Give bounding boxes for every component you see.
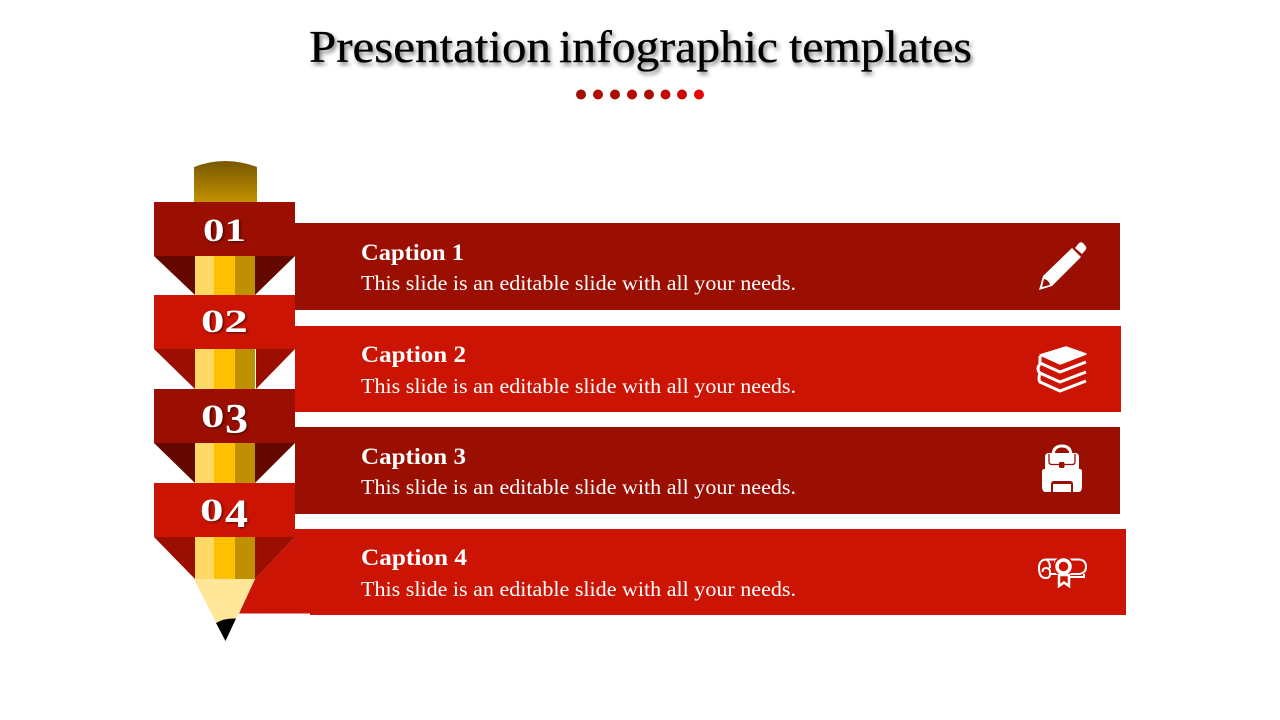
caption 4 text: This slide is an editable slide with all your needs. bbox=[361, 577, 796, 601]
caption 1 text: This slide is an editable slide with all your needs. bbox=[361, 271, 796, 295]
number 02: 02 bbox=[201, 303, 248, 339]
title: infographic bbox=[559, 21, 778, 72]
panel: caption 2 bbox=[295, 326, 1121, 412]
number 01: 01 bbox=[203, 213, 246, 249]
icon: diploma bbox=[1039, 556, 1086, 586]
dotted divider bbox=[576, 90, 704, 100]
caption 2 heading: Caption 2 bbox=[361, 342, 466, 367]
caption 3 text: This slide is an editable slide with all your needs. bbox=[361, 475, 796, 499]
caption 1 heading: Caption 1 bbox=[361, 240, 464, 265]
panel: caption 1 bbox=[295, 223, 1120, 310]
ribbon tab 02 bbox=[154, 295, 295, 389]
icon: backpack bbox=[1042, 446, 1082, 492]
number 04 bbox=[200, 492, 248, 536]
panel: caption 4 bbox=[239, 529, 1126, 615]
title: templates bbox=[789, 21, 972, 72]
caption 3 heading: Caption 3 bbox=[361, 444, 466, 469]
caption 4 heading: Caption 4 bbox=[361, 545, 468, 570]
icon: pencil bbox=[1039, 242, 1086, 290]
title: Presentation bbox=[309, 21, 551, 72]
caption 2 text: This slide is an editable slide with all your needs. bbox=[361, 374, 796, 398]
pencil body stripes bbox=[195, 256, 255, 579]
number 03 bbox=[201, 396, 248, 443]
icon: books bbox=[1038, 347, 1086, 391]
number 04: 4 bbox=[225, 493, 248, 536]
pencil bbox=[194, 161, 257, 641]
panel: caption 3 bbox=[295, 427, 1120, 514]
ribbon tab 03 bbox=[154, 389, 295, 483]
pencil eraser bbox=[194, 161, 257, 202]
pencil tip bbox=[194, 579, 255, 641]
number 04: 0 bbox=[200, 492, 223, 528]
pencil lead bbox=[216, 618, 236, 641]
ribbon tab 01 bbox=[154, 202, 295, 295]
ribbon tab 04 bbox=[154, 483, 295, 579]
number 03: 0 bbox=[201, 398, 224, 434]
number 03: 3 bbox=[225, 396, 248, 443]
